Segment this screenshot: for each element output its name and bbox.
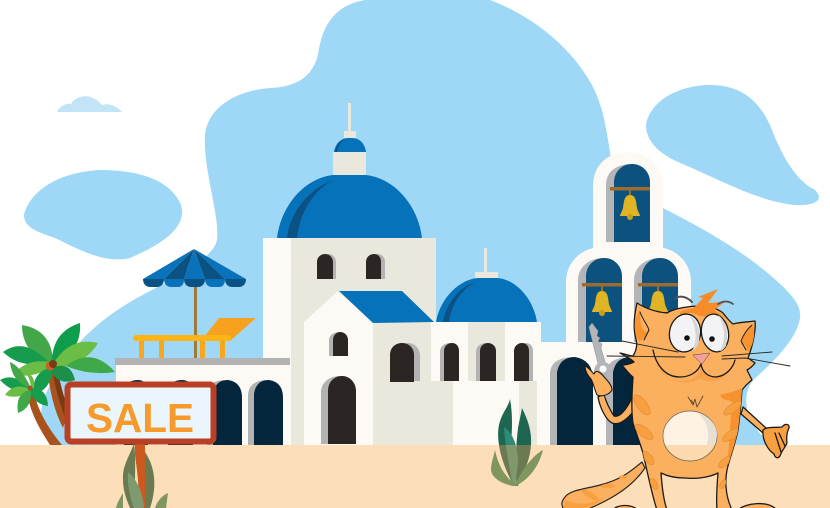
sand ground [0,445,830,508]
cat shading and stripes [631,308,754,491]
chapel door [321,376,356,444]
low left building [115,358,291,445]
sign post [135,443,145,508]
cat belly [663,411,717,461]
sun lounger [133,318,256,358]
SALE sign: SALE [86,395,194,441]
chapel window [329,332,348,356]
cat character [562,289,790,508]
cat hair tuft [690,289,725,318]
cat arm: open hand [741,407,789,458]
small domed hall [373,248,541,445]
right low wall [537,342,667,445]
cat hand with key [585,366,612,396]
cat body and head [620,303,755,508]
plant: right [491,399,543,486]
cat tail [562,462,645,508]
cat arm: key hand [598,394,633,424]
cat chest tuft [688,396,703,407]
palm trees [0,323,115,445]
cat brows [675,297,733,304]
plant: left back leaves [116,443,168,508]
key [589,323,612,380]
cat ear lines [640,312,752,350]
cupola [333,103,366,175]
cat eyes [666,312,732,354]
cat whiskers [607,341,790,366]
front gabled chapel [304,291,434,445]
upper windows [317,254,385,279]
bell window: top [606,164,650,242]
hall windows [390,343,533,382]
big dome [277,175,422,238]
SALE sign [68,384,214,442]
cat nose [693,353,710,364]
umbrella [143,249,246,358]
sky blob: left [24,170,182,259]
cloud [57,96,122,112]
blue roof [339,291,434,323]
bell tower [566,152,691,345]
large domed church [263,103,436,445]
cat smile [653,350,735,377]
bell window: lower right [634,258,678,342]
cat feet [613,504,777,508]
plant: left front leaf [128,472,144,508]
sky blob: upper right [646,85,819,205]
bell window: lower left [578,258,622,342]
